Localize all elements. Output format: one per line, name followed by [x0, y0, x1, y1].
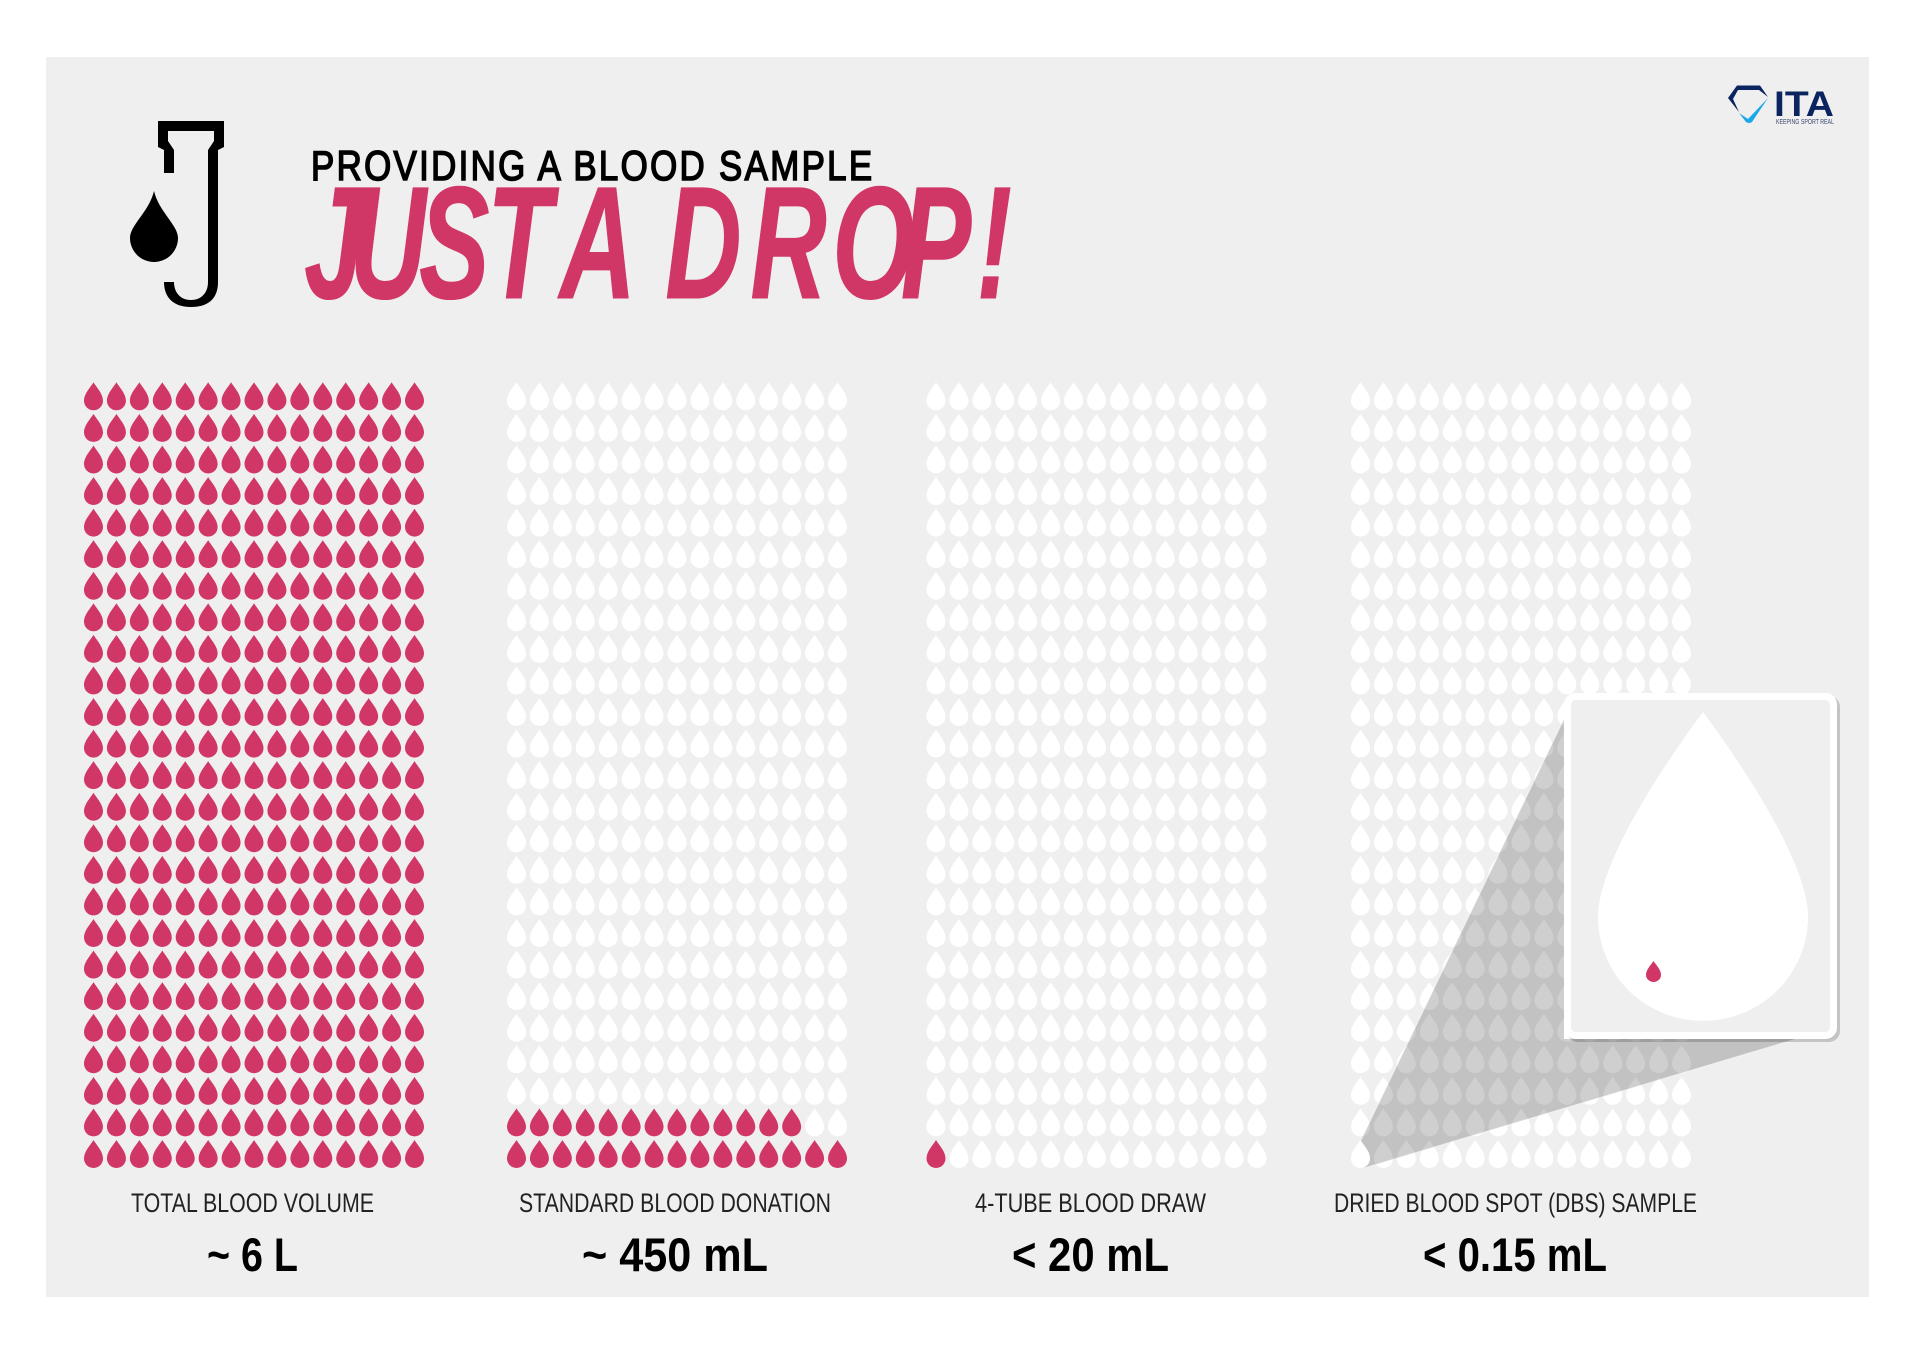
callout: magnified drop card [1567, 696, 1840, 1042]
value: 20 mL: < 20 mL [1012, 1229, 1169, 1282]
value: 0.15 mL: < 0.15 mL [1423, 1229, 1607, 1282]
label: total blood volume: TOTAL BLOOD VOLUME [131, 1188, 374, 1218]
label: 4-tube blood draw: 4-TUBE BLOOD DRAW [975, 1188, 1206, 1218]
logo tagline: KEEPING SPORT REAL [1776, 119, 1834, 126]
column: standard blood donation [507, 382, 847, 1282]
drop grid: white [507, 382, 847, 1168]
logo: ITA [1728, 85, 1834, 126]
logo wordmark: ITA [1774, 85, 1834, 124]
column: total blood volume [84, 382, 424, 1282]
value: 450 mL: ~ 450 mL [582, 1229, 768, 1282]
logo diamond [1728, 86, 1768, 112]
tiny red drop [1646, 961, 1661, 982]
magnifying cone shadow [1361, 719, 1796, 1168]
drop grid: white [926, 382, 1267, 1168]
red drop: one [926, 1140, 946, 1168]
column: dried blood spot sample [1334, 382, 1796, 1282]
value: 6 L: ~ 6 L [207, 1229, 298, 1282]
logo check mark [1739, 98, 1768, 123]
drop grid: white [1351, 382, 1691, 1168]
card [1568, 696, 1834, 1036]
title: just a drop: JUST A DROP! [304, 153, 1012, 332]
icon: test tube with blood drop [130, 121, 224, 307]
red drops: two bottom rows [507, 1108, 847, 1168]
card shadow [1567, 696, 1840, 1042]
label: dried blood spot: DRIED BLOOD SPOT (DBS) SAMPLE [1334, 1188, 1697, 1218]
title: providing a blood sample: PROVIDING A BLOOD SAMPLE [311, 143, 872, 190]
drop grid: all red [84, 382, 424, 1168]
column: 4-tube blood draw [926, 382, 1267, 1282]
label: standard blood donation: STANDARD BLOOD DONATION [519, 1188, 831, 1218]
enlarged white drop [1598, 712, 1808, 1021]
source drop [1351, 1140, 1370, 1168]
